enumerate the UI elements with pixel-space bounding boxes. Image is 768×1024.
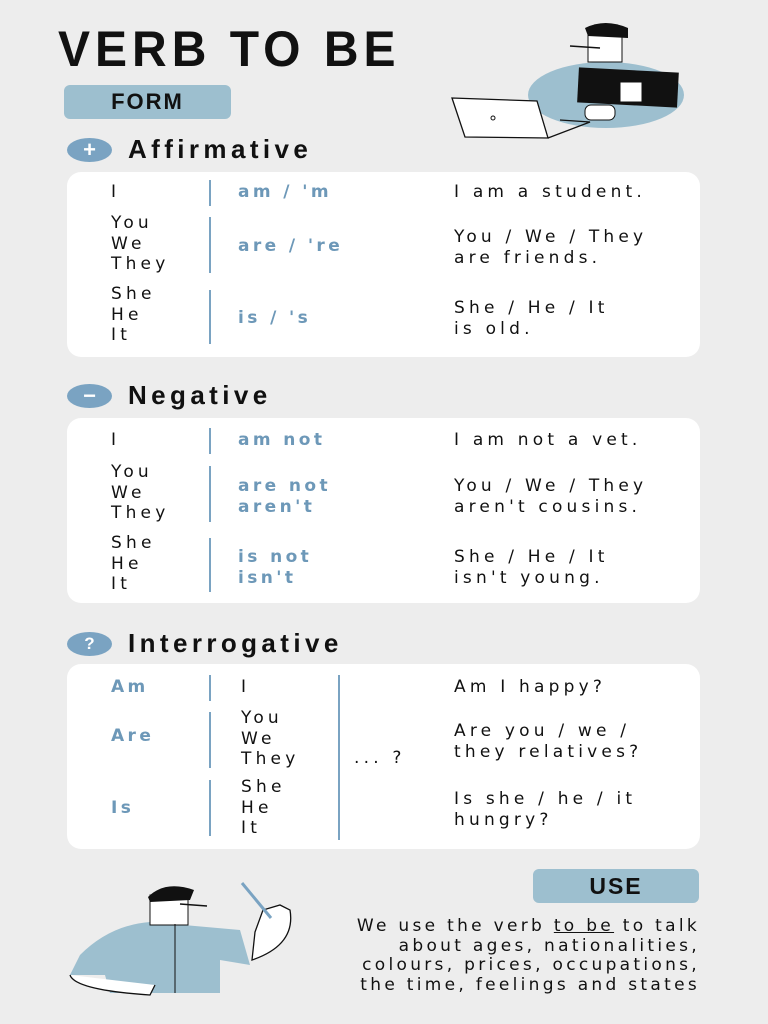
panel: negative: It (111, 574, 131, 594)
use text: We use the verb to be to talk (357, 916, 700, 936)
panel: affirmative: is old. (454, 318, 534, 338)
panel: affirmative: You (111, 213, 153, 233)
panel: affirmative: It (111, 325, 131, 345)
panel: negative: aren't cousins. (454, 496, 641, 516)
panel: negative: is not (238, 547, 312, 567)
panel: interrogative: Is (111, 798, 134, 818)
use text (357, 916, 700, 994)
panel: interrogative (67, 664, 700, 849)
use tag: USE (589, 873, 643, 899)
panel: affirmative: She / He / It (454, 298, 609, 318)
panel: interrogative: You (241, 708, 283, 728)
panel: negative: are not (238, 476, 331, 496)
form tag: FORM (111, 89, 184, 114)
panel: negative: isn't (238, 568, 296, 588)
use tag (533, 869, 699, 903)
icon: question (67, 632, 112, 656)
panel: interrogative: Are (111, 726, 154, 746)
icon: plus (67, 138, 112, 162)
panel: interrogative: Are you / we / (454, 721, 630, 741)
panel: affirmative: is / 's (238, 308, 311, 328)
panel: affirmative (67, 172, 700, 357)
panel: interrogative: I (241, 677, 250, 697)
form tag (64, 85, 231, 119)
panel: affirmative: are / 're (238, 236, 343, 256)
panel: negative: isn't young. (454, 568, 604, 588)
panel: affirmative: I am a student. (454, 182, 646, 202)
panel: affirmative: am / 'm (238, 182, 332, 202)
panel: affirmative: I (111, 182, 120, 202)
panel: negative: They (111, 503, 169, 523)
panel: interrogative: We (241, 728, 276, 748)
panel: interrogative: They (241, 749, 299, 769)
panel: affirmative: They (111, 254, 169, 274)
heading: interrogative: Interrogative (128, 628, 343, 658)
illustration: man reading (451, 23, 684, 139)
panel: negative: I am not a vet. (454, 430, 641, 450)
icon: minus (67, 384, 112, 408)
panel: negative: She / He / It (454, 547, 609, 567)
icon: question: ? (84, 634, 95, 653)
use text: about ages, nationalities, (399, 936, 700, 956)
illustration: man with pen (69, 882, 292, 996)
panel: interrogative: Am (111, 677, 149, 697)
icon: plus: + (83, 137, 96, 162)
panel: negative: You / We / They (454, 476, 647, 496)
panel: negative: am not (238, 430, 325, 450)
panel: interrogative: Am I happy? (454, 677, 606, 697)
panel: negative: He (111, 554, 143, 574)
panel: negative: I (111, 430, 120, 450)
panel: negative: You (111, 462, 153, 482)
panel: negative (67, 418, 700, 603)
panel: negative: We (111, 482, 146, 502)
panel: interrogative: they relatives? (454, 742, 642, 762)
panel: interrogative: He (241, 798, 273, 818)
panel: negative: She (111, 533, 156, 553)
heading: affirmative: Affirmative (128, 134, 312, 164)
panel: interrogative: hungry? (454, 810, 553, 830)
panel: negative: aren't (238, 496, 315, 516)
panel: affirmative: We (111, 234, 146, 254)
panel: affirmative: You / We / They (454, 227, 647, 247)
panel: affirmative: She (111, 284, 156, 304)
panel: affirmative: He (111, 304, 143, 324)
use text: colours, prices, occupations, (362, 955, 700, 975)
panel: interrogative: It (241, 818, 261, 838)
use text: the time, feelings and states (360, 974, 700, 994)
panel: interrogative: Is she / he / it (454, 789, 636, 809)
title: VERB TO BE (58, 22, 400, 77)
heading: negative: Negative (128, 380, 272, 410)
icon: minus: − (83, 383, 96, 408)
panel: affirmative: are friends. (454, 248, 601, 268)
panel: interrogative: She (241, 777, 286, 797)
panel: interrogative: ... ? (354, 748, 406, 768)
